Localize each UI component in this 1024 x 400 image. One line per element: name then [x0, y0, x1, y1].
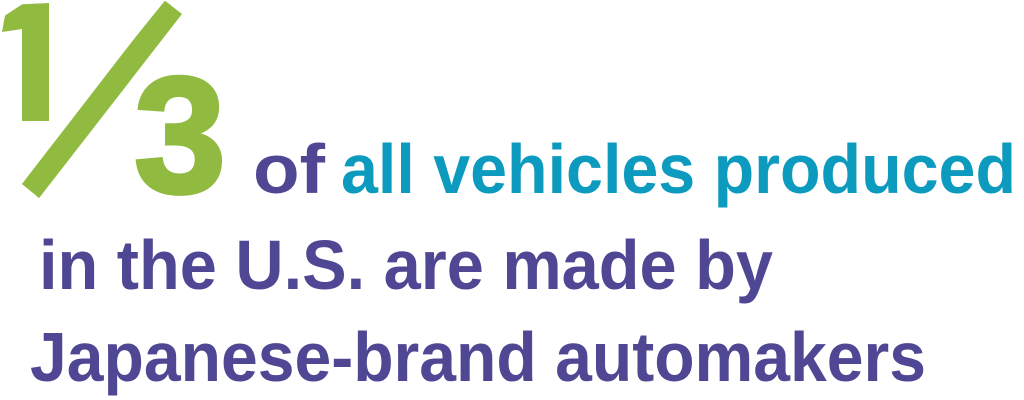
text line 2: in the U.S. are made by: [39, 226, 773, 304]
text line 3: Japanese-brand automakers: [30, 318, 926, 396]
fraction: one third: [2, 0, 222, 198]
text line 1: of: of: [253, 130, 326, 208]
denominator 3: 3: [134, 43, 226, 227]
